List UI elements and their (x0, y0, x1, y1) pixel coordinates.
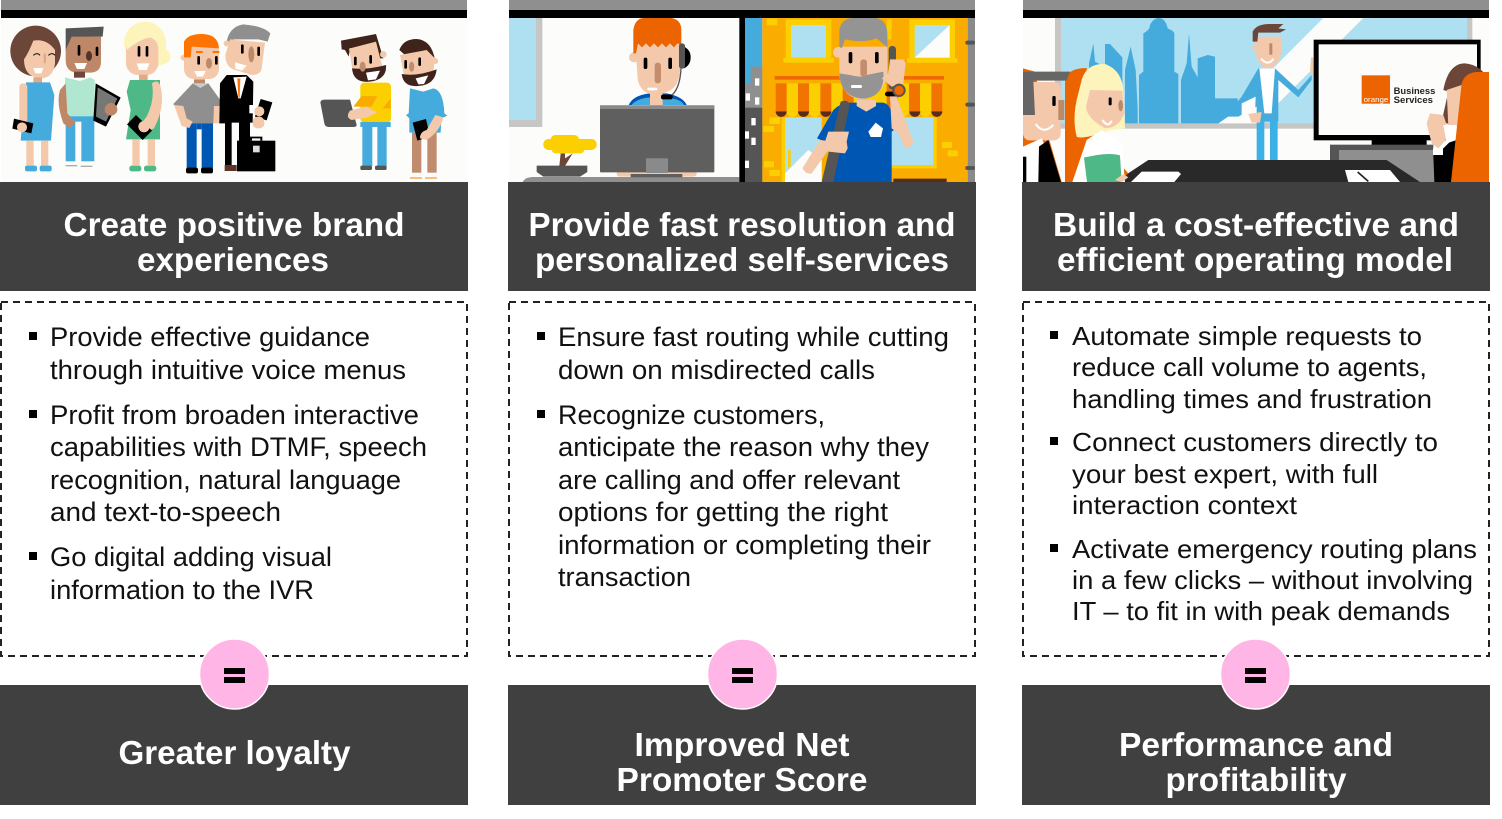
panel: build a cost-effective and efficient operating model (1022, 0, 1490, 805)
dashed list box: options for getting the right (558, 497, 889, 527)
dashed list box: through intuitive voice menus (50, 355, 406, 385)
dashed list box: Provide effective guidance (50, 322, 370, 352)
result banner (1022, 685, 1490, 805)
top bar (509, 0, 975, 18)
illustration: boardroom presentation: orange (1364, 97, 1388, 104)
dashed list box: Ensure fast routing while cutting (558, 322, 949, 352)
equals badge (200, 639, 270, 709)
illustration: boardroom presentation (1023, 18, 1489, 182)
heading (508, 182, 976, 291)
dashed list box: Connect customers directly to (1072, 427, 1438, 457)
panel: provide fast resolution and personalized self-services (508, 0, 976, 805)
dashed list box: capabilities with DTMF, speech (50, 432, 427, 462)
dashed list box: Recognize customers, (558, 400, 825, 430)
dashed list box: in a few clicks – without involving (1072, 565, 1473, 595)
dashed list box (1, 302, 467, 656)
result banner: Promoter Score (616, 761, 868, 798)
result banner: Improved Net (634, 726, 850, 763)
dashed list box: transaction (558, 562, 691, 592)
equals badge (708, 639, 778, 709)
dashed list box: are calling and offer relevant (558, 465, 901, 495)
dashed list box: handling times and frustration (1072, 384, 1432, 414)
dashed list box: IT – to fit in with peak demands (1072, 596, 1450, 626)
dashed list box: information to the IVR (50, 575, 314, 605)
illustration: boardroom presentation: Business (1394, 86, 1435, 96)
heading: Build a cost-effective and (1053, 206, 1459, 243)
dashed list box: Activate emergency routing plans (1072, 534, 1477, 564)
top bar (1, 0, 467, 18)
dashed list box: and text-to-speech (50, 497, 281, 527)
illustration: boardroom presentation: Services (1394, 95, 1433, 105)
dashed list box: interaction context (1072, 490, 1298, 520)
dashed list box: down on misdirected calls (558, 355, 875, 385)
result banner: profitability (1166, 761, 1347, 798)
dashed list box: information or completing their (558, 530, 931, 560)
heading (1022, 182, 1490, 291)
heading: experiences (137, 241, 329, 278)
result banner: Performance and (1119, 726, 1393, 763)
dashed list box: Go digital adding visual (50, 542, 332, 572)
dashed list box: your best expert, with full (1072, 459, 1378, 489)
heading: efficient operating model (1057, 241, 1453, 278)
dashed list box (509, 302, 975, 656)
panel: create positive brand experiences (0, 0, 468, 805)
dashed list box: recognition, natural language (50, 465, 401, 495)
heading: personalized self-services (535, 241, 949, 278)
result banner: Greater loyalty (118, 734, 351, 771)
heading: Create positive brand (64, 206, 404, 243)
illustration: group of customers (1, 18, 468, 182)
top bar (1023, 0, 1489, 18)
dashed list box: reduce call volume to agents, (1072, 352, 1427, 382)
equals badge (1220, 639, 1290, 709)
result banner (0, 685, 468, 805)
dashed list box: anticipate the reason why they (558, 432, 930, 462)
dashed list box: Automate simple requests to (1072, 321, 1422, 351)
illustration: agent and customer on the phone (509, 18, 975, 182)
heading (0, 182, 468, 291)
dashed list box (1023, 302, 1489, 656)
dashed list box: Profit from broaden interactive (50, 400, 419, 430)
result banner (508, 685, 976, 805)
heading: Provide fast resolution and (528, 206, 956, 243)
